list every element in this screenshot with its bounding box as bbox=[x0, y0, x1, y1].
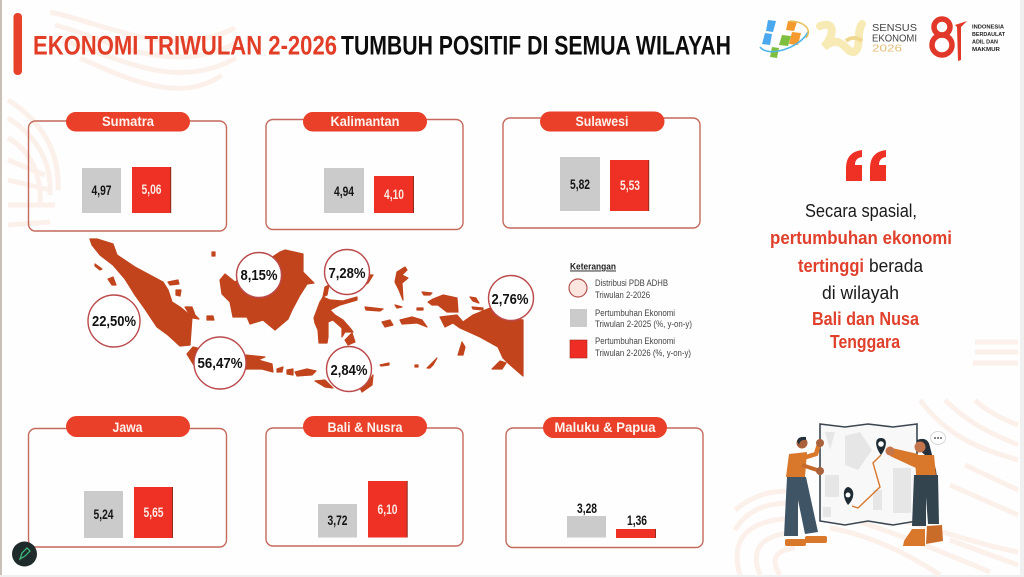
logo: HUT RI 81: INDONESIA bbox=[972, 24, 1005, 30]
logo: HUT RI 81: MAKMUR bbox=[972, 47, 1001, 53]
panel: Sumatra: 4,97 bbox=[92, 182, 112, 198]
logo: BPS bbox=[760, 20, 808, 58]
legend: Keterangan bbox=[570, 260, 616, 272]
share circle: Jawa 56,47% bbox=[194, 337, 246, 389]
panel: Sulawesi: Sulawesi bbox=[576, 113, 628, 129]
quote text: berada bbox=[869, 256, 924, 276]
share circle: Jawa 56,47%: 56,47% bbox=[198, 355, 242, 372]
panel: Kalimantan: 4,10 bbox=[384, 186, 404, 202]
logo: HUT RI 81: ADIL DAN bbox=[972, 40, 998, 46]
quote text: di wilayah bbox=[822, 283, 899, 303]
quote text: Secara spasial, bbox=[805, 201, 917, 221]
panel: Bali & Nusra: Bali & Nusra bbox=[328, 419, 403, 435]
panel: Kalimantan bbox=[266, 112, 463, 230]
panel: Kalimantan: 4,94 bbox=[334, 183, 354, 199]
title: EKONOMI TRIWULAN 2-2026 bbox=[33, 30, 337, 60]
quote text: Bali dan Nusa bbox=[812, 309, 920, 329]
panel: Sulawesi: 5,53 bbox=[620, 177, 640, 193]
share circle: Sulawesi 7,28% bbox=[324, 250, 370, 294]
panel: Maluku & Papua: 1,36 bbox=[627, 512, 647, 528]
panel: Maluku & Papua: Maluku & Papua bbox=[554, 419, 656, 435]
share circle: Kalimantan 8,15% bbox=[236, 252, 282, 298]
panel: Jawa: 5,65 bbox=[144, 504, 164, 520]
share circle: Sulawesi 7,28%: 7,28% bbox=[328, 265, 366, 282]
logo: HUT RI 81 bbox=[932, 19, 1005, 61]
panel: Sulawesi: 5,82 bbox=[570, 176, 590, 192]
legend: Pertumbuhan Ekonomi bbox=[595, 307, 675, 318]
share circle: Maluku & Papua 2,76% bbox=[488, 276, 534, 320]
logo: HUT RI 81: BERDAULAT bbox=[972, 32, 1005, 38]
quote text: tertinggi bbox=[798, 256, 864, 276]
share circle: Maluku & Papua 2,76%: 2,76% bbox=[492, 291, 528, 308]
share circle: Sumatra 22,50% bbox=[88, 295, 140, 347]
title accent bar bbox=[14, 13, 22, 75]
quote text: Tenggara bbox=[830, 332, 901, 352]
panel: Maluku & Papua bbox=[506, 417, 703, 548]
logo: Sensus Ekonomi 2026: SENSUS bbox=[872, 23, 917, 34]
panel: Jawa: 5,24 bbox=[94, 506, 114, 522]
logo: Sensus Ekonomi 2026: 2026 bbox=[872, 44, 903, 54]
share circle: Sumatra 22,50%: 22,50% bbox=[92, 313, 136, 330]
title bbox=[33, 30, 731, 60]
panel: Kalimantan: Kalimantan bbox=[330, 113, 400, 129]
icon: pencil button bbox=[12, 542, 37, 566]
share circle: Kalimantan 8,15%: 8,15% bbox=[240, 267, 278, 284]
panel: Sulawesi bbox=[503, 112, 700, 228]
title: TUMBUH POSITIF DI SEMUA WILAYAH bbox=[341, 30, 731, 60]
legend bbox=[569, 260, 692, 358]
share circle: Bali & Nusra 2,84%: 2,84% bbox=[330, 362, 368, 379]
panel: Sumatra bbox=[28, 112, 226, 231]
illustration: two people reading a map bbox=[784, 424, 946, 546]
logo: Sensus Ekonomi 2026: EKONOMI bbox=[872, 34, 917, 44]
quote text: pertumbuhan ekonomi bbox=[770, 228, 952, 248]
icon: quotation mark bbox=[846, 150, 886, 181]
legend: Triwulan 2-2025 (%, y-on-y) bbox=[595, 318, 692, 329]
panel: Bali & Nusra bbox=[266, 416, 463, 546]
panel: Bali & Nusra: 6,10 bbox=[378, 501, 398, 517]
panel: Sumatra: 5,06 bbox=[142, 181, 162, 197]
share circle: Bali & Nusra 2,84% bbox=[326, 346, 372, 392]
legend: Triwulan 2-2026 bbox=[595, 289, 650, 300]
panel: Jawa bbox=[28, 416, 226, 547]
panel: Jawa: Jawa bbox=[112, 419, 143, 435]
legend: Pertumbuhan Ekonomi bbox=[595, 335, 675, 346]
panel: Sumatra: Sumatra bbox=[102, 113, 154, 129]
quote text bbox=[770, 201, 952, 352]
panel: Bali & Nusra: 3,72 bbox=[328, 512, 348, 528]
legend: Distribusi PDB ADHB bbox=[595, 277, 668, 288]
legend: Triwulan 2-2026 (%, y-on-y) bbox=[595, 347, 691, 358]
map of Indonesia bbox=[90, 239, 523, 392]
panel: Maluku & Papua: 3,28 bbox=[577, 500, 597, 516]
logo: Sensus Ekonomi 2026 bbox=[820, 23, 917, 54]
